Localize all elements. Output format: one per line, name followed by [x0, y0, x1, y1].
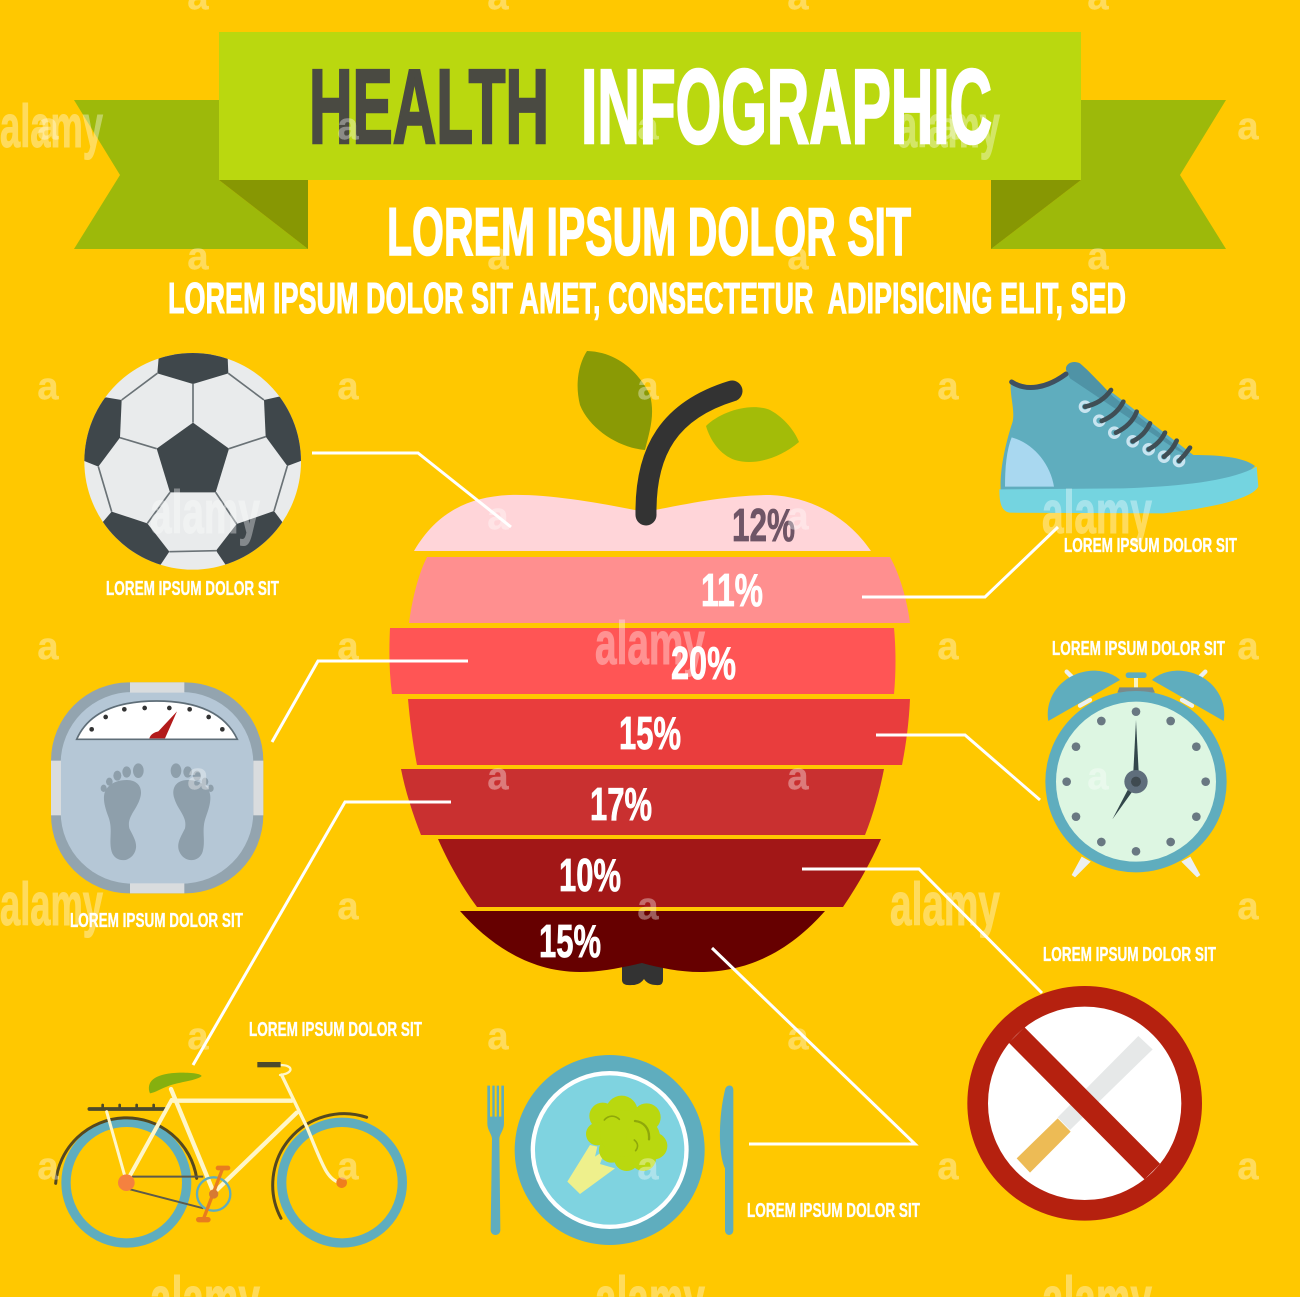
stock watermark: a	[1087, 1016, 1109, 1058]
percentage labels: 20%	[671, 637, 736, 689]
stock watermark: a	[787, 496, 809, 538]
knife	[720, 1085, 733, 1235]
label: plate: LOREM IPSUM DOLOR SIT	[747, 1200, 920, 1222]
plate	[515, 1055, 705, 1245]
stock watermark: alamy	[0, 871, 103, 938]
stock watermark: a	[787, 756, 809, 798]
icon: plate with broccoli and cutlery	[487, 1055, 733, 1245]
broccoli	[567, 1096, 667, 1194]
stock watermark: a	[487, 236, 509, 278]
stock watermark: a	[187, 756, 209, 798]
apple band 17%	[401, 769, 884, 835]
apple band 20%	[389, 628, 896, 694]
apple band 10%	[438, 839, 881, 907]
stock watermark: a	[187, 1016, 209, 1058]
stock watermark: alamy	[150, 479, 260, 546]
icon: bicycle	[56, 1062, 402, 1243]
label: soccer ball: LOREM IPSUM DOLOR SIT	[106, 578, 279, 600]
percentage labels: 10%	[559, 849, 621, 901]
percentage labels: 11%	[701, 564, 763, 616]
stock watermark: alamy	[1042, 479, 1152, 546]
stock watermark: a	[37, 106, 59, 148]
percentage labels	[539, 499, 795, 967]
fork	[487, 1086, 504, 1235]
label: bicycle: LOREM IPSUM DOLOR SIT	[249, 1019, 422, 1041]
label: no smoking: LOREM IPSUM DOLOR SIT	[1043, 944, 1216, 966]
stock watermark: a	[1237, 626, 1259, 668]
stock watermark: a	[337, 626, 359, 668]
stock watermark: a	[1237, 886, 1259, 928]
stock watermark: a	[937, 1146, 959, 1188]
stock watermark: a	[1237, 1146, 1259, 1188]
apple chart	[389, 351, 910, 985]
apple base nub	[622, 960, 663, 985]
stock watermark: a	[487, 1016, 509, 1058]
banner ribbon	[74, 32, 1226, 249]
apple stem	[646, 391, 732, 515]
stock watermark: a	[1087, 236, 1109, 278]
stock watermark: a	[37, 366, 59, 408]
stock watermark: a	[37, 1146, 59, 1188]
icon: alarm clock	[1045, 671, 1227, 877]
stock watermark: a	[337, 366, 359, 408]
icon: sneaker	[999, 362, 1258, 513]
stock watermark: alamy	[897, 93, 1000, 160]
label: weighing scale: LOREM IPSUM DOLOR SIT	[70, 910, 243, 932]
stock watermark: a	[487, 756, 509, 798]
stock watermark: alamy	[595, 610, 705, 677]
percentage labels: 15%	[539, 915, 601, 967]
percentage labels: 17%	[590, 778, 652, 830]
stock watermark: a	[937, 106, 959, 148]
icon: weighing scale	[51, 682, 263, 893]
title: HEALTH	[309, 48, 549, 166]
stock watermark: a	[187, 236, 209, 278]
stock watermark: a	[937, 626, 959, 668]
stock watermark: a	[637, 366, 659, 408]
stock watermark: a	[637, 106, 659, 148]
stock watermark: alamy	[0, 93, 103, 160]
apple band 15% bottom	[460, 911, 825, 972]
stock watermark: a	[637, 1146, 659, 1188]
stock watermark: a	[337, 886, 359, 928]
stock watermark: a	[337, 106, 359, 148]
apple band 12%	[414, 495, 871, 551]
stock watermark: a	[937, 366, 959, 408]
stock watermark: a	[1237, 106, 1259, 148]
stock watermark: a	[487, 496, 509, 538]
stock watermark: a	[37, 626, 59, 668]
icon: no smoking	[978, 996, 1192, 1210]
stock watermark: a	[337, 1146, 359, 1188]
apple band 15%	[408, 699, 910, 765]
connector lines	[193, 453, 1058, 1144]
stock watermark: alamy	[890, 871, 1000, 938]
stock watermark: a	[637, 886, 659, 928]
percentage labels: 12%	[732, 499, 795, 551]
apple leaves	[578, 351, 799, 462]
percentage labels: 15%	[619, 707, 681, 759]
icon: soccer ball	[80, 350, 305, 570]
stock watermark: a	[787, 1016, 809, 1058]
stock watermark: a	[1087, 756, 1109, 798]
apple band 11%	[409, 557, 910, 623]
subtitle: LOREM IPSUM DOLOR SIT	[387, 194, 911, 270]
label: alarm clock: LOREM IPSUM DOLOR SIT	[1052, 638, 1225, 660]
stock watermark: a	[1237, 366, 1259, 408]
title	[309, 48, 992, 166]
stock watermark: a	[787, 236, 809, 278]
